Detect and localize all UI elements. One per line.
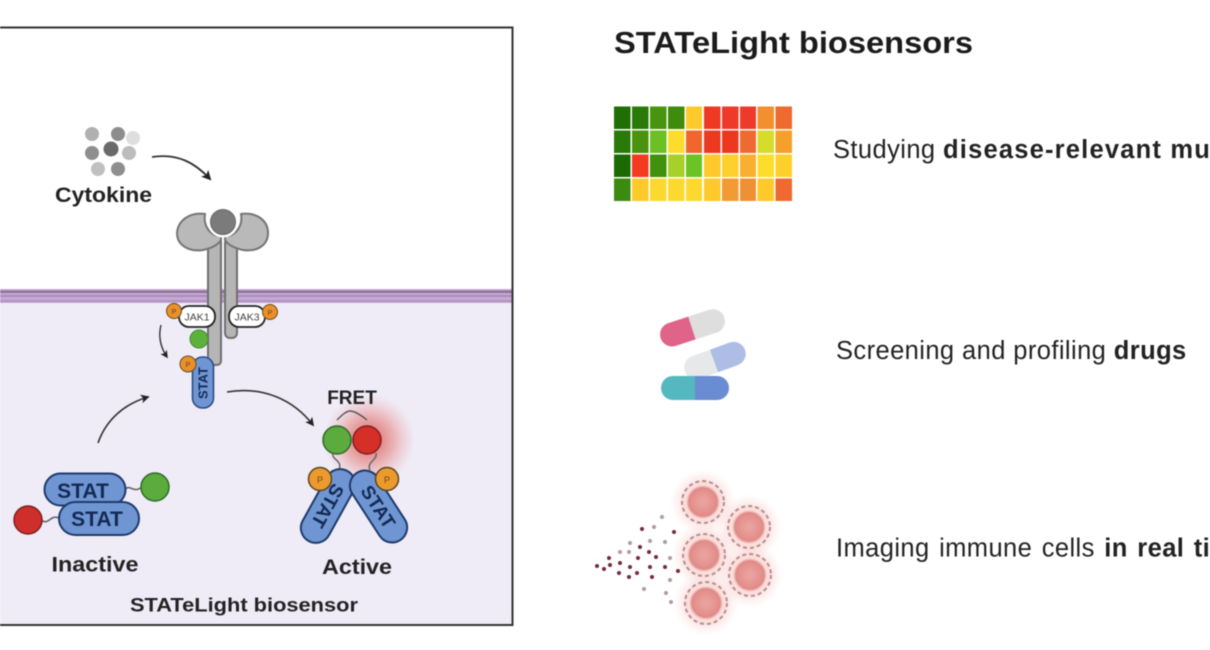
text: drugs: Screening and profiling drugs [836,337,1187,365]
active STAT dimer with FRET: P [384,475,390,485]
heatmap icon [614,106,792,201]
active STAT dimer with FRET: P [317,475,323,485]
icon: immune cells [670,469,783,636]
JAK1 kinase: P [172,309,177,316]
label: inactive: Inactive [52,554,138,576]
inactive STAT biosensor: STAT [71,508,123,531]
arrow: inactive to docking [98,397,148,443]
JAK1 kinase: JAK1 [184,312,210,324]
label: active: Active [322,556,392,579]
label: cytokine: Cytokine [55,184,152,207]
right STAT [344,465,413,548]
right STAT: STAT [356,482,399,533]
cell membrane [0,289,512,303]
left STAT [295,464,361,548]
STAT docking at receptor: P [186,362,191,369]
STAT docking at receptor [180,330,214,408]
icon: cytokine particles [85,127,140,176]
inactive STAT biosensor [14,473,169,535]
left STAT: STAT [306,480,347,531]
arrow: docking to active [227,391,313,425]
heading: STATeLight biosensors [614,25,973,60]
JAK3 kinase [229,304,278,327]
panel caption: STATeLight biosensor [130,596,359,616]
arrow: cytokine to receptor [152,156,210,179]
active STAT dimer with FRET [295,394,415,548]
arrow: phosphate transfer [160,325,167,357]
inactive STAT biosensor: STAT [57,480,109,503]
panel: signalling diagram [0,28,512,625]
icon: drug capsules [657,306,749,400]
JAK3 kinase: JAK3 [234,312,260,324]
JAK3 kinase: P [268,310,273,317]
receptor [177,206,268,365]
icon: cytokine spray dots [595,515,680,604]
label: FRET: FRET [327,388,377,409]
JAK1 kinase [166,304,215,327]
STAT docking at receptor: STAT [196,367,210,399]
